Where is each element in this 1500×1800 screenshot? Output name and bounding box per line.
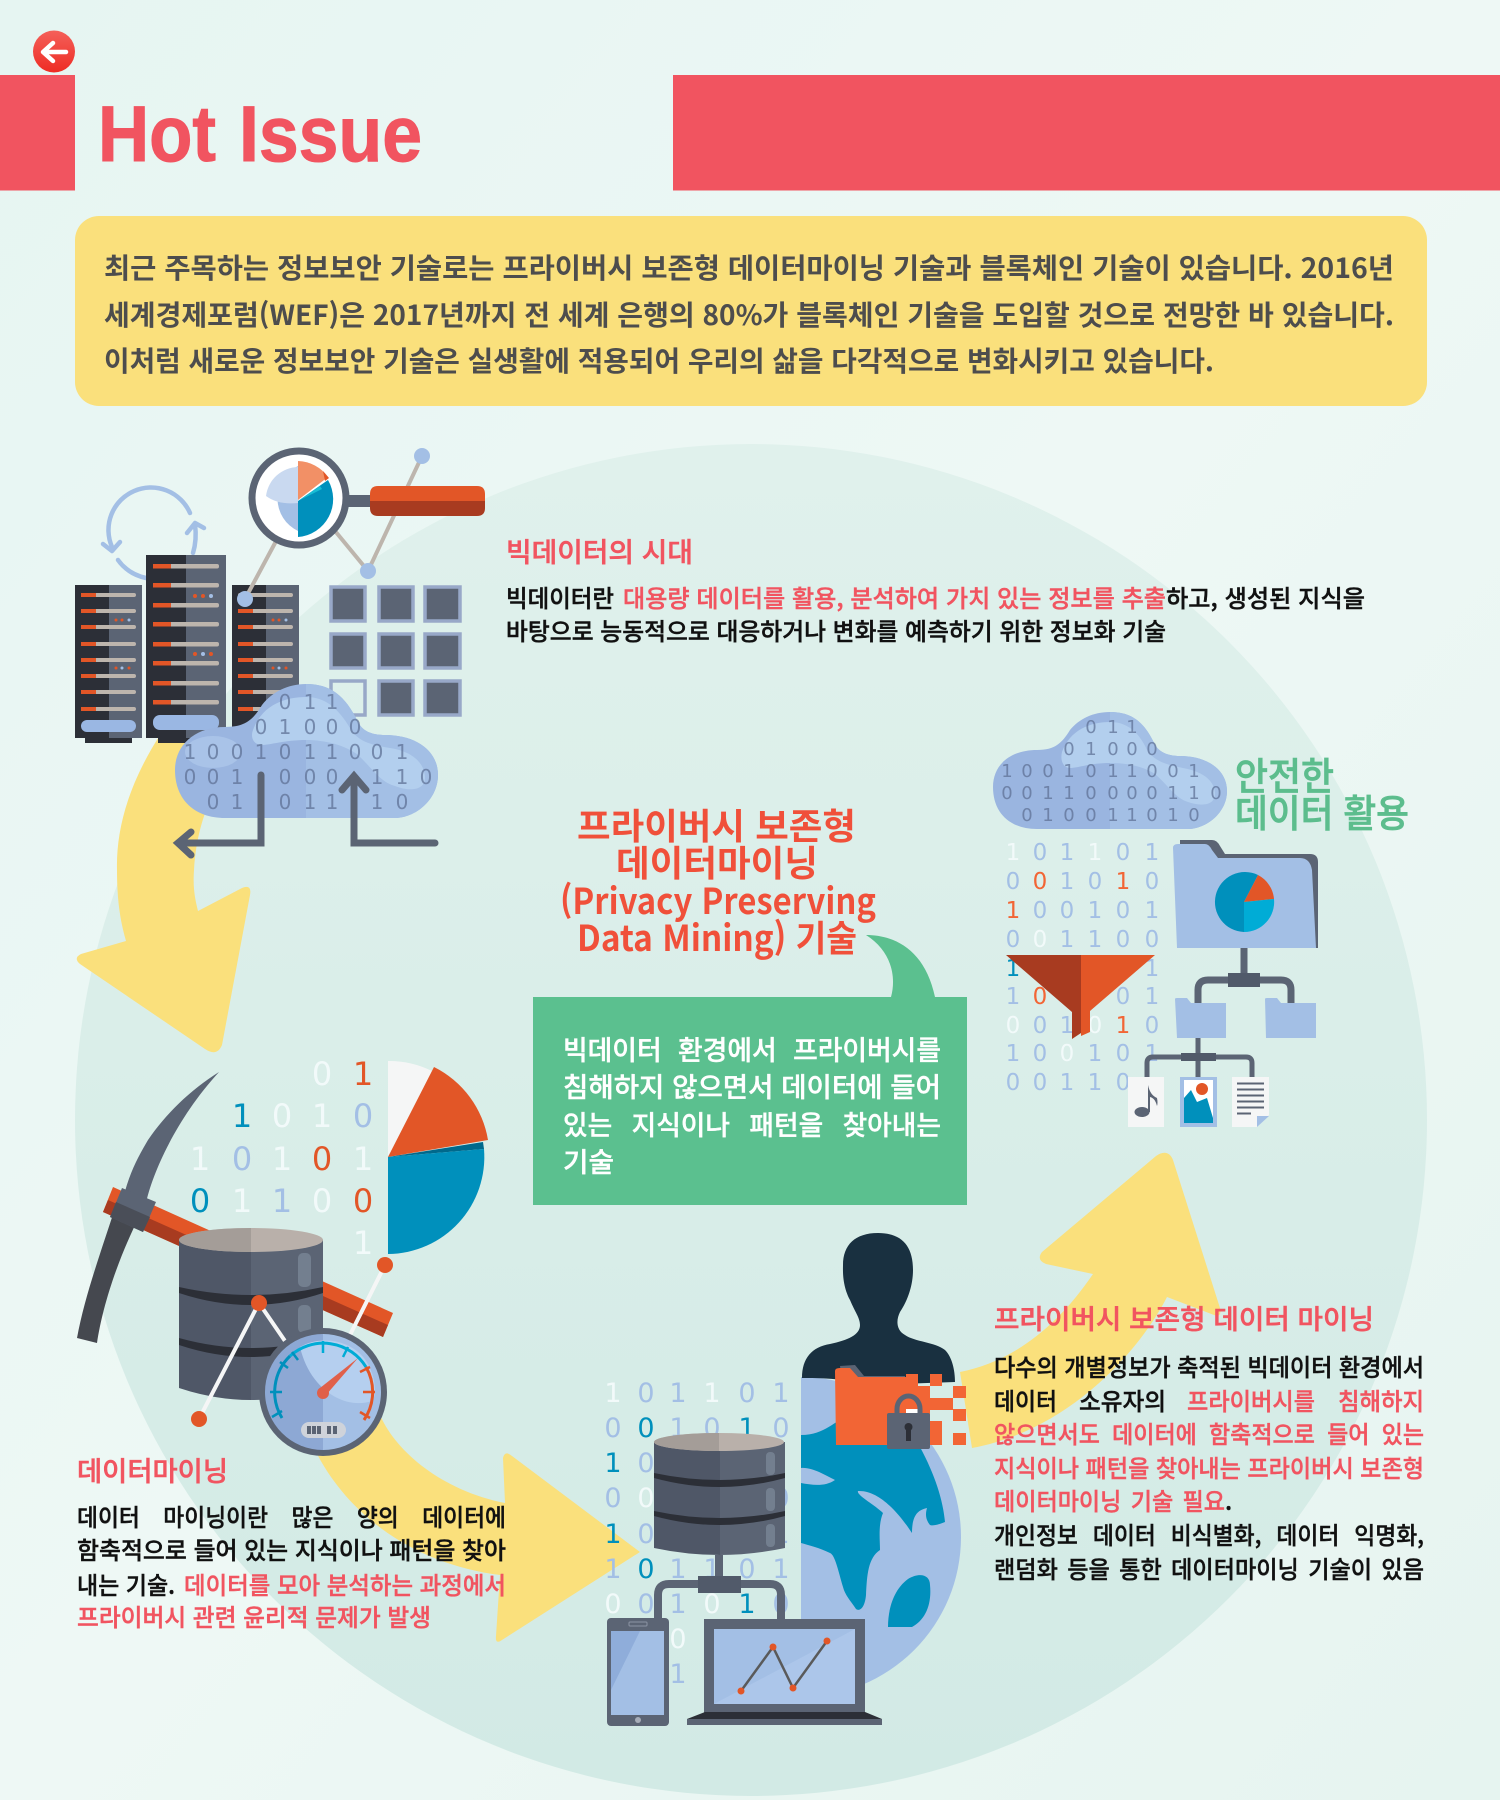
body text: 프라이버시를 — [1187, 1382, 1315, 1417]
binary digits: 00101 — [1033, 898, 1159, 924]
binary digits — [1006, 840, 1159, 1096]
icon: cloud upload and download arrows — [178, 775, 435, 855]
binary digits: 0 — [353, 1097, 373, 1135]
heading: safe data use: 안전한 — [1235, 746, 1334, 801]
title: Hot — [98, 89, 216, 178]
binary digits: 0 — [637, 1483, 655, 1514]
icon: laptop with line chart — [687, 1619, 882, 1725]
center title: 데이터마이닝 — [616, 835, 818, 887]
heading: 프라이버시 보존형 데이터 마이닝 — [994, 1298, 1374, 1337]
body text: 소유자의 — [1079, 1382, 1166, 1417]
title: Issue — [239, 89, 422, 178]
binary digits: 010 — [637, 1589, 790, 1620]
callout: definition: 기술 — [563, 1141, 614, 1180]
callout: definition: 빅데이터 환경에서 프라이버시를 — [563, 1029, 941, 1068]
center title: Data Mining) 기술 — [577, 910, 857, 962]
icon: phone — [607, 1618, 669, 1726]
heading: 빅데이터의 시대 — [506, 531, 693, 570]
section: data mining text — [77, 1450, 506, 1633]
binary digits: 11 — [604, 1378, 721, 1409]
line chart behind magnifier — [245, 456, 422, 599]
icon: binary cloud: 001000110 — [184, 765, 432, 789]
body text: 하고, 생성된 지식을 — [1166, 579, 1365, 614]
binary digits: 0 — [353, 1182, 373, 1220]
binary digits: 1 — [604, 1448, 622, 1479]
icon: person silhouette — [802, 1233, 955, 1385]
binary digits: 10101 — [1006, 1041, 1159, 1067]
server right — [232, 585, 299, 738]
icon: small folders — [1175, 998, 1316, 1038]
body text: 데이터 — [994, 1382, 1057, 1417]
binary digits: 0 — [669, 1624, 687, 1655]
icon: binary cloud: 00110000110 — [1001, 783, 1222, 804]
binary digits: 01 — [272, 1097, 332, 1135]
binary digits: 0 — [1033, 927, 1047, 953]
icon: document file — [1232, 1077, 1269, 1127]
binary digits: 0 — [637, 1554, 655, 1585]
binary digits: 10 — [232, 1182, 332, 1220]
callout: definition: 침해하지 않으면서 데이터에 들어 — [563, 1066, 941, 1105]
binary digits: 1 — [669, 1659, 687, 1690]
icon: binary cloud: 1001011001 — [1001, 761, 1200, 782]
binary digits: 0 — [1060, 1041, 1074, 1067]
center title: 프라이버시 보존형 — [577, 798, 856, 850]
illustration: data mining — [77, 1055, 488, 1456]
callout: definition — [533, 935, 967, 1205]
icon: music file — [1128, 1077, 1164, 1127]
binary digits: 01 — [1033, 869, 1130, 895]
binary digits: 0101 — [637, 1378, 790, 1409]
body text: 침해하지 — [1338, 1382, 1424, 1417]
binary digits: 010 — [1033, 1013, 1159, 1039]
binary digits: 00 — [1006, 1013, 1102, 1039]
icon: image file — [1180, 1077, 1217, 1127]
center title — [560, 798, 876, 962]
binary digits: 111 — [190, 1140, 373, 1178]
body text: . — [1225, 1482, 1232, 1517]
center title: (Privacy Preserving — [560, 873, 876, 925]
intro panel — [75, 216, 1427, 406]
binary digits: 0 — [232, 1140, 252, 1178]
icon: pixelated orange folder — [835, 1365, 966, 1445]
icon: sync arrows — [103, 487, 204, 578]
server left — [75, 585, 142, 743]
body text: 않으면서도 데이터에 함축적으로 들어 있는 — [994, 1415, 1424, 1450]
heading: safe data use — [1235, 746, 1409, 838]
section: big data era — [506, 531, 1365, 647]
binary digits: 0101 — [1033, 840, 1159, 866]
icon: magnifier with pie chart — [252, 451, 485, 545]
binary digits: 1 — [353, 1055, 373, 1093]
header band right — [673, 75, 1500, 190]
icon: binary cloud: 01000 — [1063, 739, 1158, 760]
binary digits: 0 — [1033, 984, 1047, 1010]
binary digits: 1 — [1006, 898, 1020, 924]
icon: funnel — [1006, 955, 1155, 1039]
body text: 데이터를 모아 분석하는 과정에서 — [184, 1566, 506, 1601]
body text: 다수의 개별정보가 축적된 빅데이터 환경에서 — [994, 1348, 1424, 1383]
binary digits: 101 — [1006, 984, 1159, 1010]
intro panel: 세계경제포럼(WEF)은 2017년까지 전 세계 은행의 80%가 블록체인 기술을 도입할 것으로 전망한 바 있습니다. — [104, 294, 1394, 334]
binary digits: 0100 — [1006, 869, 1159, 895]
illustration: safe data use — [993, 712, 1409, 1127]
heading: 데이터마이닝 — [77, 1450, 228, 1489]
binary digits: 1 — [232, 1097, 252, 1135]
binary digits: 1 — [604, 1519, 622, 1550]
binary digits: 11101 — [604, 1554, 790, 1585]
pickaxe — [77, 1072, 393, 1343]
icon: binary cloud: 011 — [1085, 717, 1138, 738]
body text — [77, 1498, 506, 1633]
icon: padlock — [887, 1396, 930, 1449]
binary digits: 01 — [637, 1413, 756, 1444]
device connectors — [658, 1555, 781, 1620]
back button icon — [33, 30, 75, 72]
icon: speed gauge — [259, 1328, 387, 1456]
body text: 지식이나 패턴을 찾아내는 프라이버시 보존형 — [994, 1449, 1424, 1484]
binary digits — [604, 1378, 790, 1690]
header band left — [0, 75, 75, 190]
icon: data tile grid — [331, 587, 460, 715]
body text: 빅데이터란 — [506, 579, 614, 614]
arrow: big data to data mining — [77, 735, 300, 1052]
illustration: big data servers, magnifier and cloud — [75, 448, 485, 855]
icon: binary cloud: 010011010 — [1021, 805, 1200, 826]
binary digits: 1 — [272, 1182, 292, 1220]
data links — [199, 1265, 385, 1419]
icon: binary cloud: 0101110 — [207, 790, 408, 814]
binary digits: 1 — [738, 1589, 756, 1620]
binary digits: 01 — [637, 1519, 790, 1550]
binary digits: 0 — [190, 1182, 210, 1220]
body text — [994, 1348, 1424, 1585]
body text: 랜덤화 등을 통한 데이터마이닝 기술이 있음 — [994, 1550, 1424, 1585]
binary digits: 0 — [312, 1055, 332, 1093]
body text: 대용량 데이터를 활용, 분석하여 가치 있는 정보를 추출 — [623, 579, 1166, 614]
body text: 바탕으로 능동적으로 대응하거나 변화를 예측하기 위한 정보화 기술 — [506, 612, 1166, 647]
intro panel: 이처럼 새로운 정보보안 기술은 실생활에 적용되어 우리의 삶을 다각적으로 변화시키고 있습니다. — [104, 340, 1214, 380]
arrow: privacy preserving to safe use — [960, 1153, 1220, 1448]
icon: binary cloud — [993, 712, 1227, 829]
binary digits: 00 — [604, 1483, 790, 1514]
binary digits: 00 — [604, 1589, 721, 1620]
binary digits: 0 — [637, 1448, 655, 1479]
body text: 내는 기술. — [77, 1566, 175, 1601]
intro panel: 최근 주목하는 정보보안 기술로는 프라이버시 보존형 데이터마이닝 기술과 블록체인 기술이 있습니다. 2016년 — [104, 247, 1394, 287]
binary digits: 11 — [1006, 840, 1102, 866]
icon: database — [179, 1228, 323, 1400]
icon: binary cloud — [175, 684, 438, 818]
binary digits — [190, 1055, 373, 1262]
icon: binary cloud: 011 — [279, 690, 338, 714]
title — [98, 89, 422, 178]
callout: definition: 있는 지식이나 패턴을 찾아내는 — [563, 1104, 941, 1143]
arrow: data mining to privacy preserving — [315, 1415, 640, 1642]
body text: 개인정보 데이터 비식별화, 데이터 익명화, — [994, 1516, 1424, 1551]
icon: globe — [801, 1377, 961, 1697]
icon: database — [654, 1433, 785, 1555]
icon: binary cloud: 01000 — [255, 715, 361, 739]
binary digits: 1 — [1006, 956, 1020, 982]
server middle — [146, 555, 226, 743]
body text: 프라이버시 관련 윤리적 문제가 발생 — [77, 1598, 431, 1633]
body text — [506, 579, 1365, 647]
illustration: privacy preserving person and devices — [604, 1233, 966, 1726]
binary digits: 1 — [353, 1224, 373, 1262]
heading: safe data use: 데이터 활용 — [1235, 783, 1409, 838]
binary digits: 01100 — [1006, 927, 1159, 953]
body text: 데이터마이닝 기술 필요 — [994, 1482, 1225, 1517]
body text: 데이터 마이닝이란 많은 양의 데이터에 — [77, 1498, 506, 1533]
binary digits: 1 — [1116, 1013, 1130, 1039]
section: privacy preserving data mining text — [994, 1298, 1424, 1585]
icon: folder with pie chart — [1173, 840, 1318, 948]
binary digits: 0 — [312, 1140, 332, 1178]
folder tree connectors — [1147, 948, 1291, 1077]
binary digits: 1 — [1145, 956, 1159, 982]
icon: binary cloud: 1001011001 — [184, 740, 408, 764]
body text: 함축적으로 들어 있는 지식이나 패턴을 찾아 — [77, 1531, 506, 1566]
binary digits: 0100 — [604, 1413, 790, 1444]
pie chart — [388, 1061, 488, 1254]
binary digits: 00110 — [1006, 1070, 1130, 1096]
